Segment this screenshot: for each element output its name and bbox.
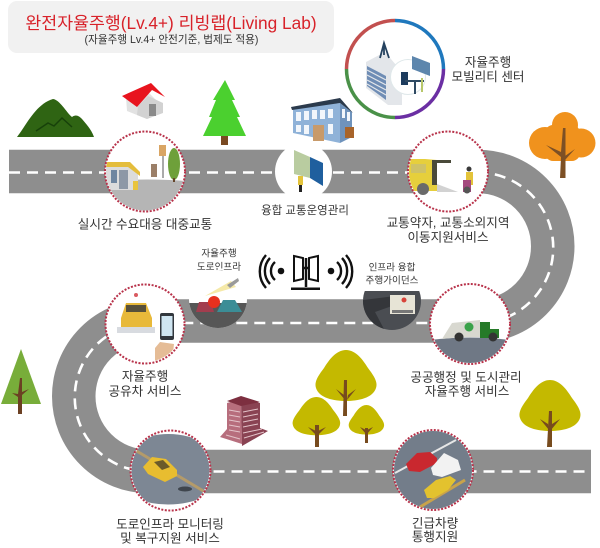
label: mobility center: 자율주행	[465, 54, 511, 70]
label: public and city services	[410, 370, 522, 398]
node: mobility support	[408, 132, 488, 212]
icon: high-rise building	[220, 396, 268, 446]
title: 완전자율주행(Lv.4+) 리빙랩(Living Lab)	[25, 13, 317, 33]
label: driving guidance: 인프라 융합	[369, 262, 416, 274]
icon: left green tree	[1, 349, 41, 414]
icon: green tree	[203, 80, 246, 145]
label: road monitoring: 도로인프라 모니터링	[116, 518, 224, 532]
icon: mobility center ring	[346, 20, 444, 118]
label: emergency vehicles: 통행지원	[412, 529, 458, 544]
node: integrated traffic operations	[275, 143, 332, 200]
icon: house	[122, 83, 165, 119]
label: road monitoring	[116, 518, 224, 546]
icon: right yellow tree	[519, 380, 581, 447]
node: road monitoring	[130, 430, 212, 510]
label: public and city services: 공공행정 및 도시관리	[410, 370, 522, 384]
label: road infrastructure: 자율주행	[201, 248, 237, 260]
icon: wireless antenna	[260, 255, 352, 290]
icon: office building	[291, 98, 354, 143]
label: road infrastructure	[197, 248, 241, 273]
label: road monitoring: 및 복구지원 서비스	[120, 532, 220, 546]
label: public and city services: 자율주행 서비스	[425, 384, 509, 398]
label: road infrastructure: 도로인프라	[197, 262, 241, 273]
label: emergency vehicles: 긴급차량	[412, 516, 459, 530]
icon: mountain	[17, 99, 94, 137]
label: real-time public transport: 실시간 수요대응 대중교통	[78, 218, 212, 232]
node: public and city services	[430, 284, 510, 365]
icon: orange tree	[529, 112, 596, 178]
label: shared car service: 자율주행	[122, 368, 168, 384]
node: shared car service	[106, 284, 184, 364]
title box	[8, 1, 334, 53]
label: mobility support: 교통약자, 교통소외지역	[387, 216, 509, 230]
node: real-time public transport	[105, 132, 185, 212]
label: driving guidance	[366, 262, 419, 286]
node: emergency vehicles	[393, 430, 473, 510]
winding road	[9, 172, 591, 472]
label: shared car service: 공유차 서비스	[108, 384, 182, 398]
label: shared car service	[108, 368, 182, 398]
label: integrated traffic operations: 융합 교통운영관리	[261, 204, 349, 217]
label: mobility support: 이동지원서비스	[407, 230, 489, 244]
node: road infrastructure	[189, 270, 248, 330]
subtitle: (자율주행 Lv.4+ 안전기준, 법제도 적용)	[85, 34, 258, 46]
label: mobility support	[387, 216, 509, 244]
node: driving guidance	[363, 291, 421, 331]
label: emergency vehicles	[412, 516, 459, 544]
label: mobility center	[451, 54, 525, 84]
icon: yellow tree cluster	[293, 350, 384, 447]
label: driving guidance: 주행가이던스	[366, 274, 419, 286]
label: mobility center: 모빌리티 센터	[451, 70, 525, 84]
